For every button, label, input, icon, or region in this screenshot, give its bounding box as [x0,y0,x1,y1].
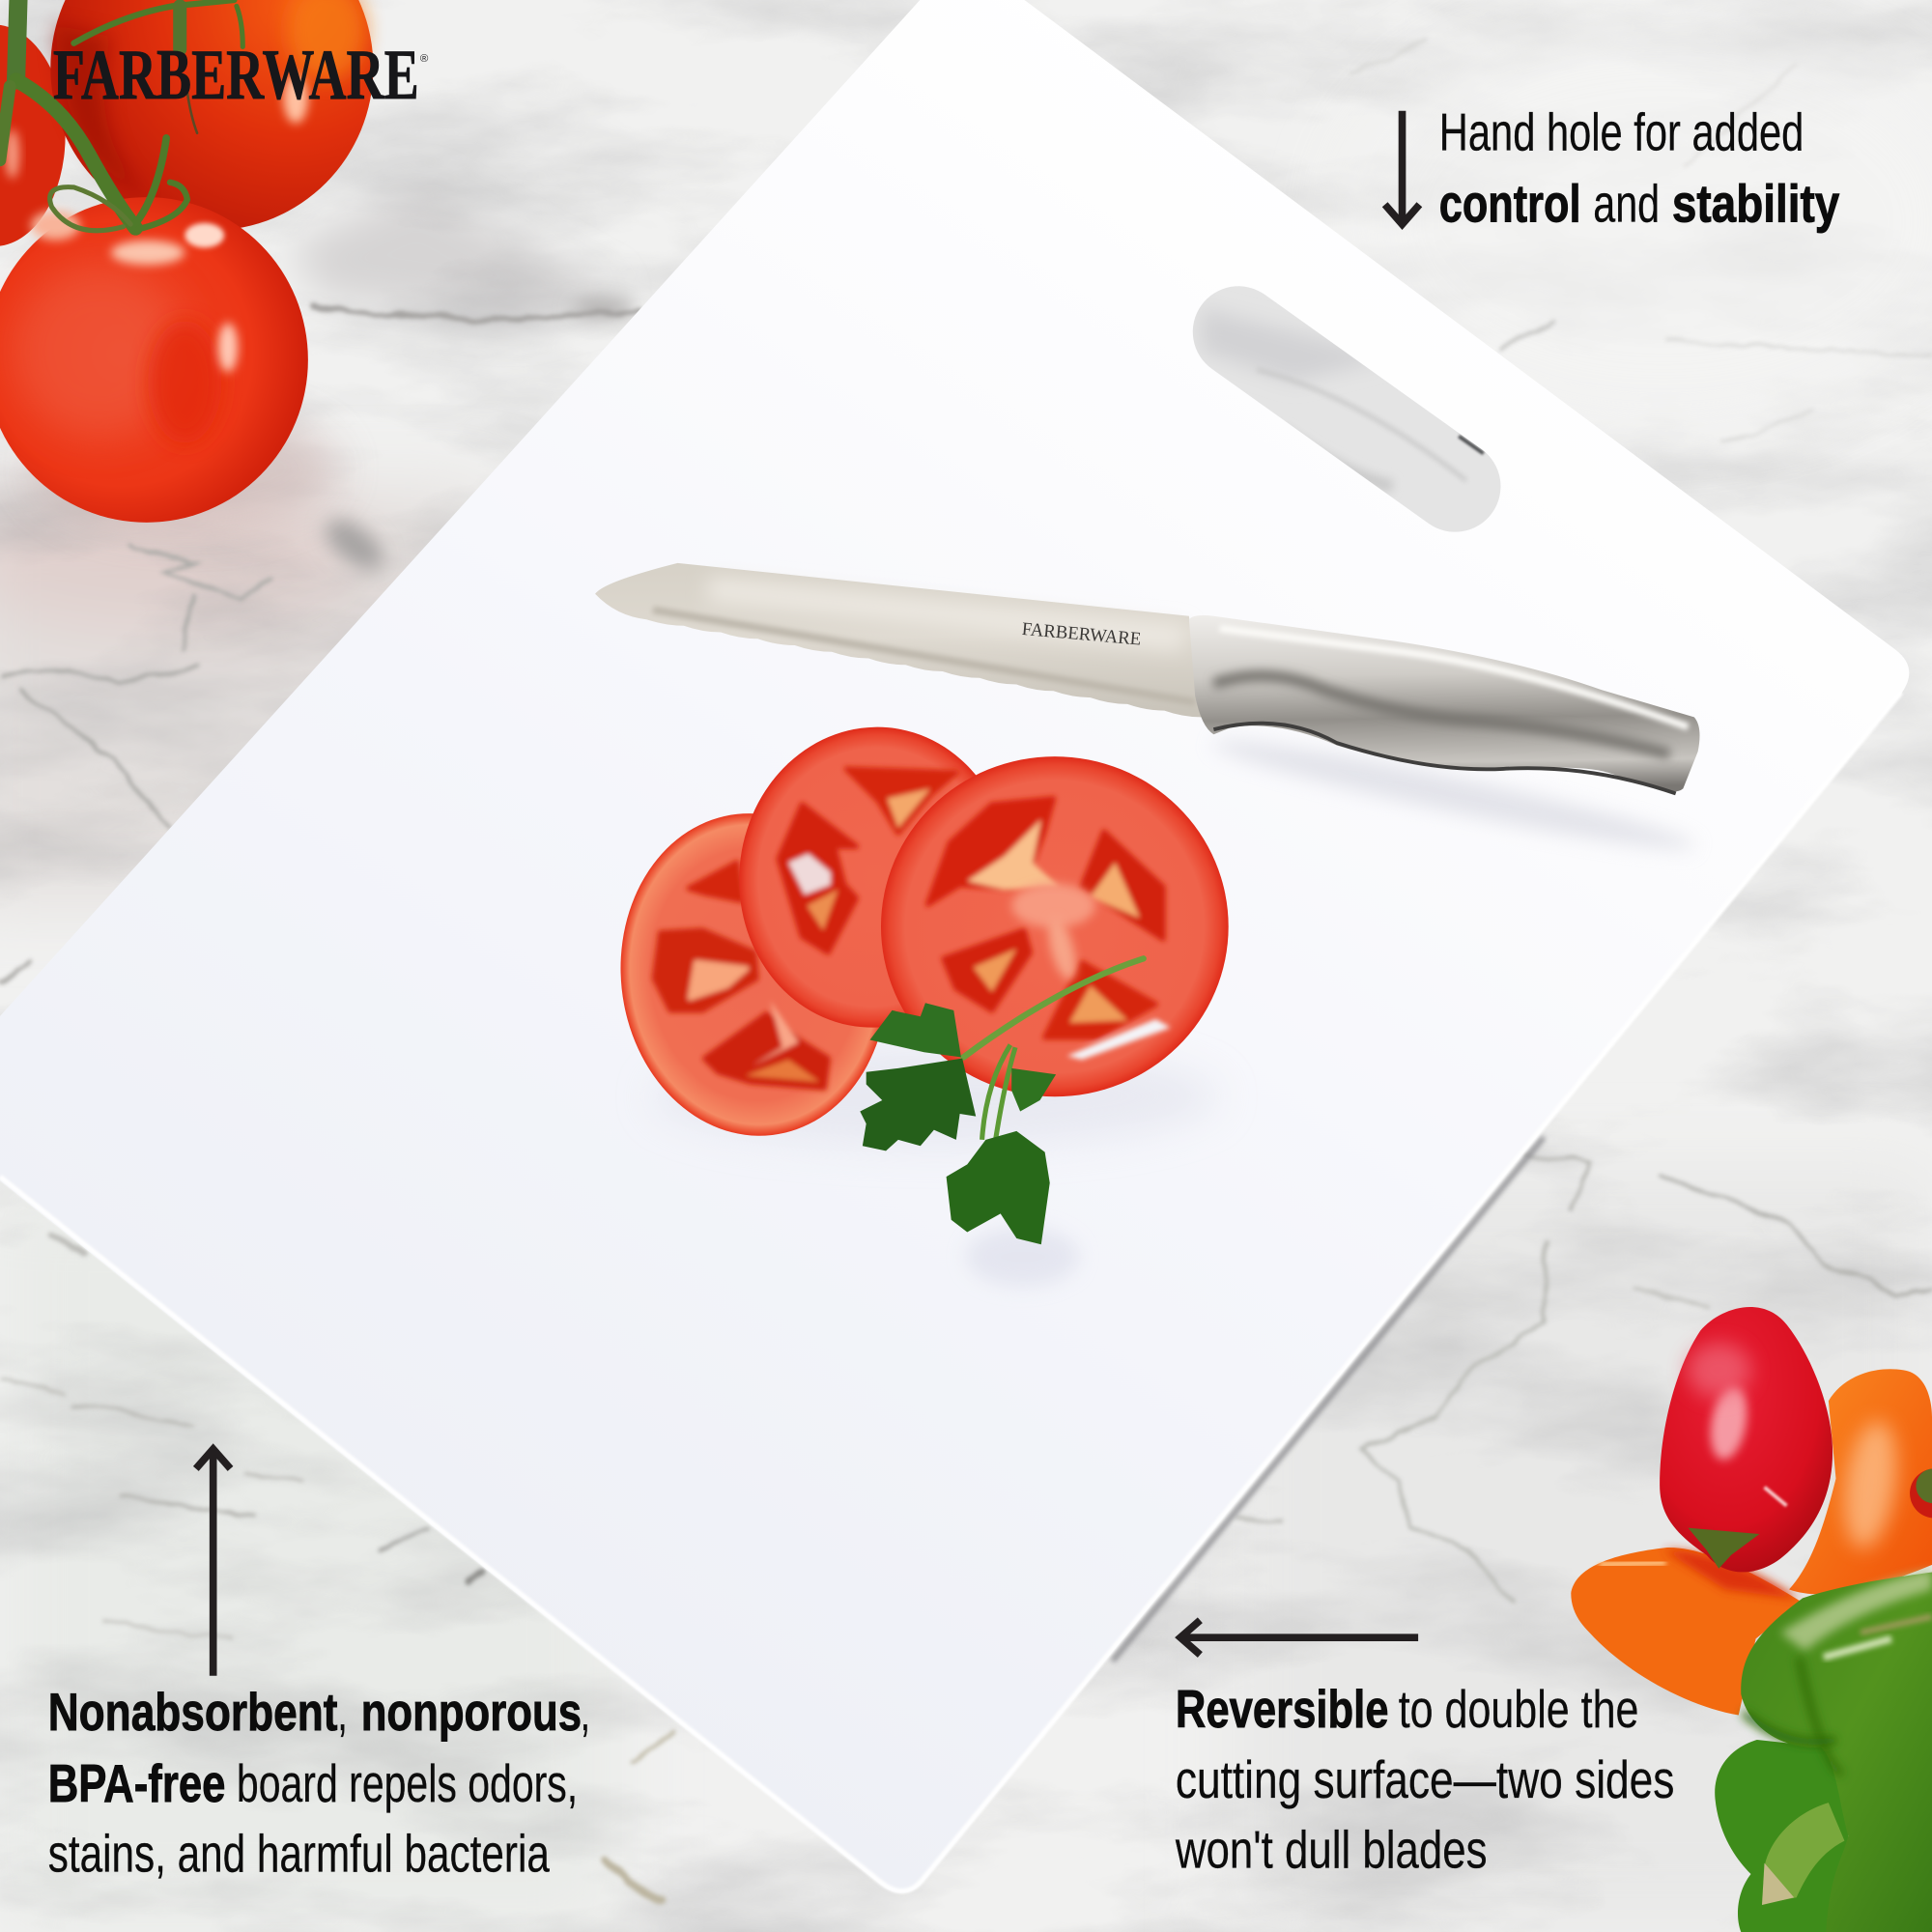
callout: reversible [1175,1679,1674,1880]
handle [1189,615,1700,793]
left partial tomato [0,25,66,246]
orange pepper left [1571,1548,1802,1716]
arrow: reversible [1180,1620,1418,1655]
callout: nonabsorbent: stains, and harmful bacteria [48,1823,550,1883]
callout: hand hole: stability [1672,174,1840,234]
callout: hand hole: Hand hole for added [1439,102,1804,162]
knife [595,563,1700,863]
tomato slices [605,716,1229,1150]
orange pepper right [1789,1369,1932,1594]
main body [1741,1573,1932,1932]
vine stems and calyx [0,0,242,231]
callout: nonabsorbent: , [337,1682,348,1742]
callout: hand hole: control [1439,174,1580,234]
main tomato [0,197,339,529]
left slice [605,800,903,1150]
callout: reversible: Reversible [1176,1679,1388,1739]
lower lobe [1715,1740,1848,1932]
blade logo: FARBERWARE [1021,619,1142,650]
callout: nonabsorbent: BPA-free [48,1753,225,1813]
green pepper [1715,1570,1932,1932]
stem [1765,1803,1844,1904]
middle slice [726,716,1023,1038]
callout: nonabsorbent: Nonabsorbent [48,1682,337,1742]
callout: reversible: cutting surface—two sides [1176,1749,1674,1809]
callout: reversible: won't dull blades [1175,1820,1488,1880]
arrow: hand hole [1385,111,1419,224]
arrow: nonabsorbent [196,1449,231,1676]
blade [595,563,1202,717]
callout: reversible: to double the [1399,1679,1638,1739]
callout: nonabsorbent: nonporous [361,1682,582,1742]
callout: nonabsorbent: board repels odors, [237,1753,578,1813]
callout: hand hole: and [1593,174,1660,234]
hand hole [1192,286,1501,531]
callout: nonabsorbent: , [581,1682,590,1742]
parsley sprig [860,958,1144,1287]
upper tomato [50,0,373,231]
tomatoes on the vine [0,0,373,529]
callout: nonabsorbent [48,1682,590,1884]
right slice [881,756,1229,1096]
brand logo: ® [420,53,429,65]
brand logo: FARBERWARE [53,36,419,115]
peppers [1571,1307,1932,1932]
red pepper [1660,1307,1833,1572]
callout: hand hole [1439,102,1840,234]
